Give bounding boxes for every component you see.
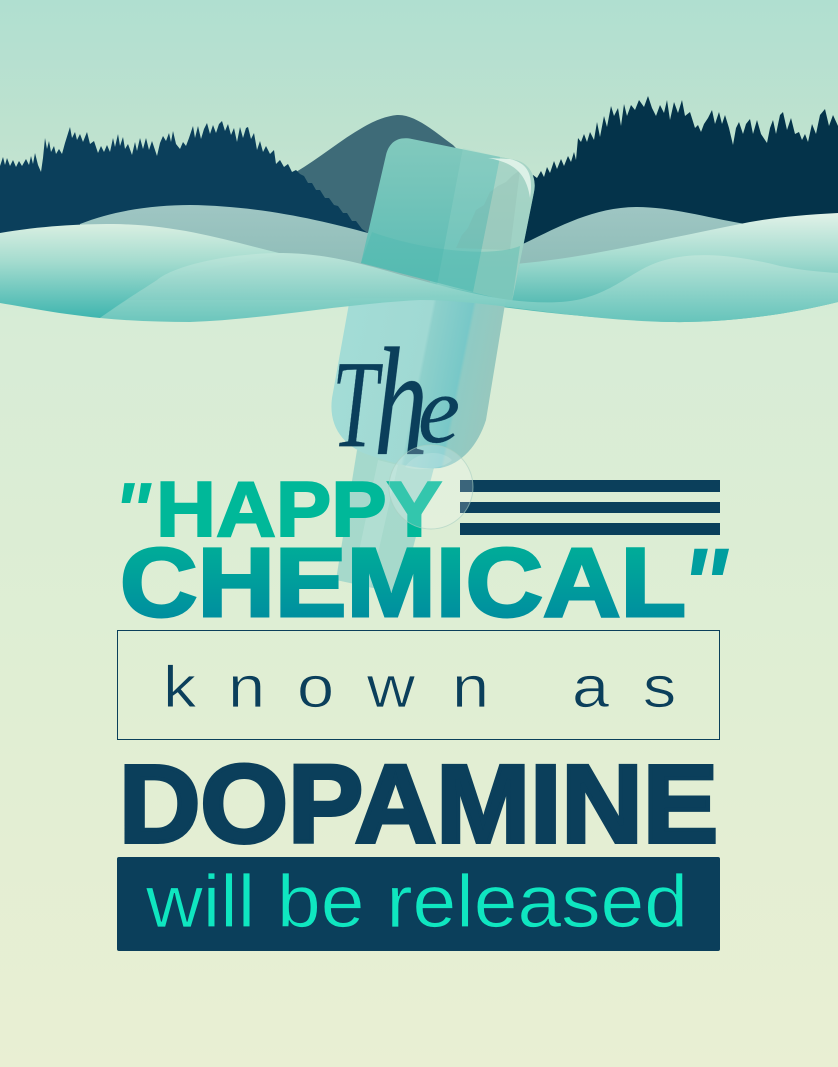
forest left bbox=[0, 121, 368, 270]
box: known as: known as bbox=[163, 655, 676, 720]
wave left bbox=[0, 224, 283, 318]
heading: The: T bbox=[332, 336, 383, 474]
heading: CHEMICAL: CHEMICAL bbox=[120, 528, 686, 637]
forest right bbox=[500, 96, 838, 270]
wave right bbox=[430, 213, 838, 322]
heading: The bbox=[332, 316, 460, 488]
heading: opening quote: " bbox=[113, 466, 152, 555]
back hill bbox=[80, 205, 745, 300]
trees seen through popsicle bbox=[456, 170, 520, 250]
wave center bbox=[100, 253, 838, 322]
three stripes bbox=[460, 480, 720, 535]
popsicle stick underwater bbox=[336, 450, 436, 594]
heading: closing quote: " bbox=[680, 527, 729, 644]
heading: The: h bbox=[374, 316, 428, 488]
popsicle bbox=[331, 138, 535, 594]
bubble bbox=[389, 445, 473, 529]
heading: HAPPY: HAPPY bbox=[156, 465, 442, 553]
popsicle body above water bbox=[361, 138, 535, 302]
mountain bbox=[296, 115, 540, 235]
popsicle body underwater bbox=[331, 298, 506, 468]
popsicle light stripe bbox=[473, 157, 535, 302]
box: known as bbox=[118, 630, 720, 740]
heading: DOPAMINE: DOPAMINE bbox=[119, 743, 718, 866]
popsicle reflection band bbox=[361, 232, 520, 302]
banner: will be released: will be released bbox=[145, 860, 688, 943]
heading: The: e bbox=[418, 356, 460, 463]
popsicle highlight bbox=[488, 158, 531, 198]
popsicle middle stripe bbox=[437, 148, 500, 292]
